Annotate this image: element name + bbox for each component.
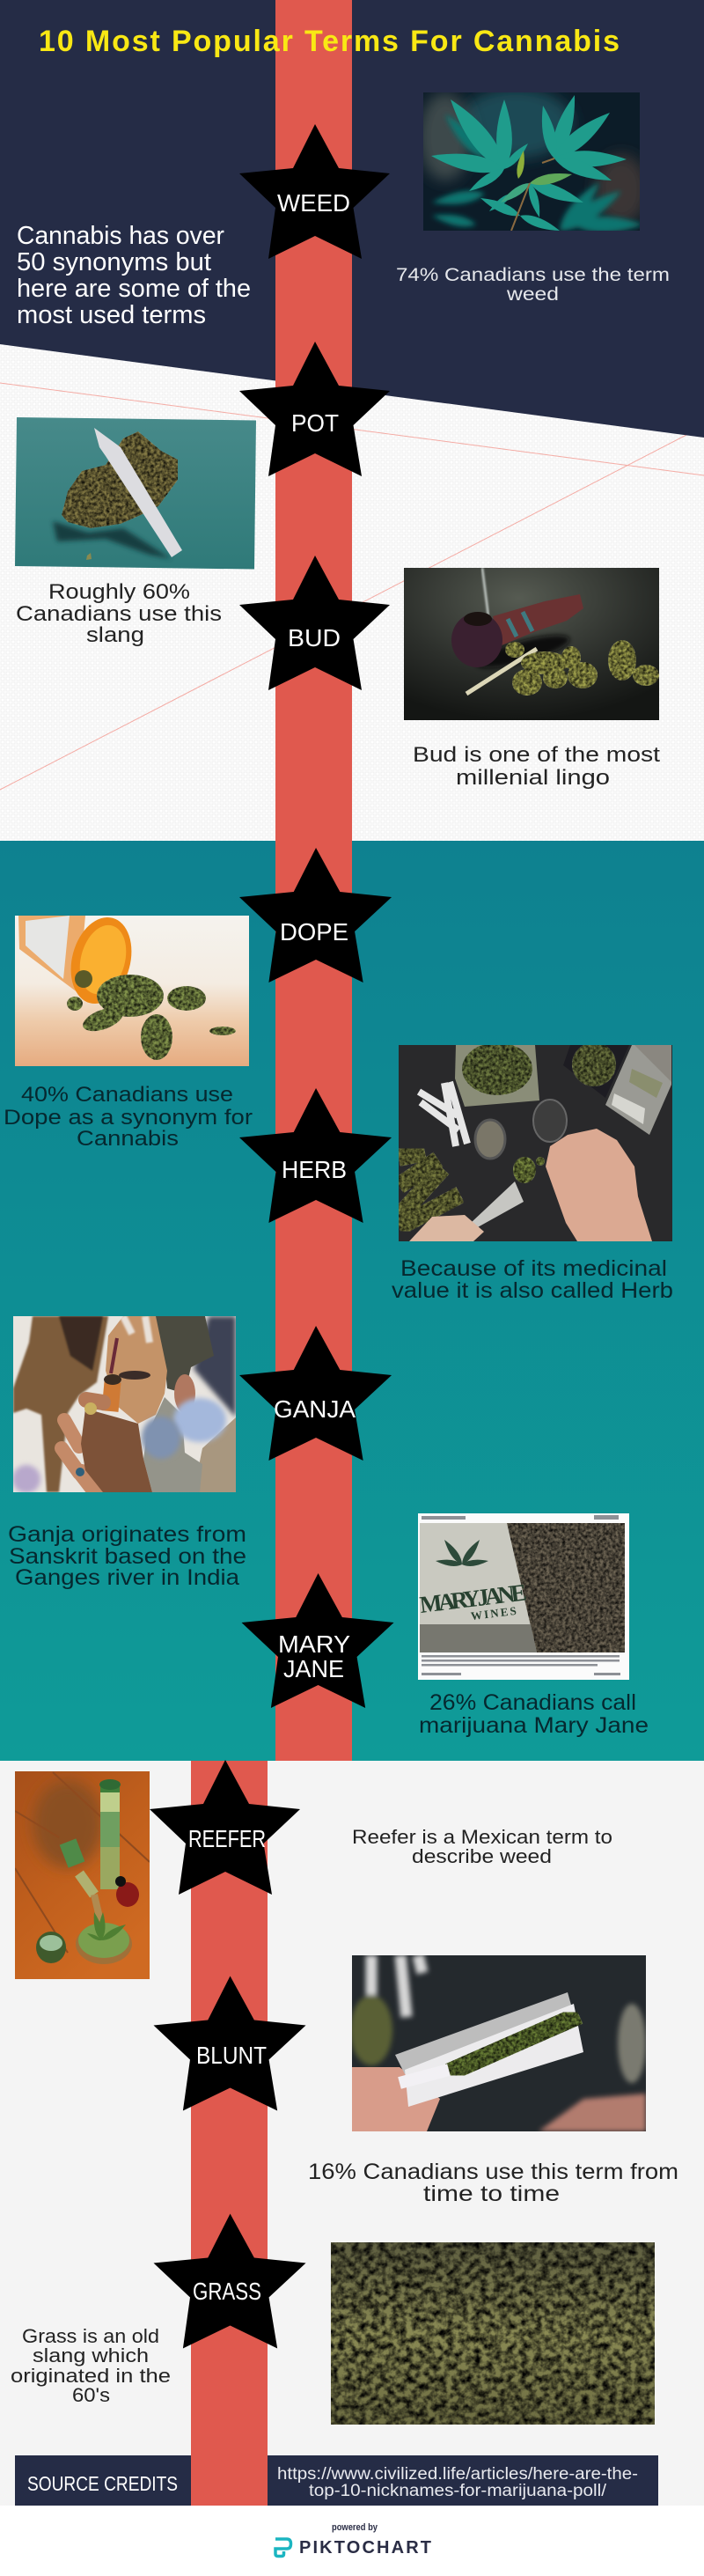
photo: weed leaves bbox=[423, 92, 640, 231]
source credits label bbox=[15, 2455, 191, 2506]
text block: reefer caption: describe weed bbox=[412, 1845, 552, 1867]
text block: herb caption: Because of its medicinal bbox=[400, 1256, 667, 1281]
text block: intro: most used terms bbox=[17, 301, 206, 329]
title: 10 Most Popular Terms For Cannabis bbox=[39, 25, 620, 58]
star: GANJA: GANJA bbox=[274, 1395, 356, 1423]
panel: teal section bbox=[0, 841, 704, 1761]
footer: powered by piktochart: PIKTOCHART bbox=[299, 2538, 431, 2558]
text block: reefer caption bbox=[352, 1826, 612, 1867]
photo: mary jane wine bottle post bbox=[418, 1513, 629, 1680]
text block: pot caption: Canadians use this bbox=[16, 602, 222, 626]
photo: pile of grass buds bbox=[331, 2242, 655, 2425]
text block: herb caption: value it is also called Herb bbox=[392, 1278, 673, 1303]
star: GRASS bbox=[153, 2213, 306, 2349]
text block: pot caption: slang bbox=[86, 623, 144, 647]
photo: rolling a blunt bbox=[352, 1955, 646, 2131]
star: MARY JANE bbox=[241, 1573, 394, 1708]
star: DOPE bbox=[239, 848, 392, 983]
text block: ganja caption: Ganges river in India bbox=[15, 1565, 239, 1590]
photo: mary jane wine bottle post: WINES bbox=[470, 1604, 517, 1623]
photo: pill bottle with buds bbox=[15, 916, 249, 1066]
text block: ganja caption: Ganja originates from bbox=[8, 1522, 246, 1547]
text block: herb caption bbox=[392, 1256, 673, 1303]
text block: reefer caption: Reefer is a Mexican term to bbox=[352, 1826, 612, 1848]
star: GRASS: GRASS bbox=[193, 2278, 261, 2305]
text block: blunt caption bbox=[308, 2160, 678, 2206]
star: BUD bbox=[239, 556, 390, 690]
star: REEFER: REEFER bbox=[188, 1825, 266, 1852]
text block: weed caption bbox=[396, 265, 670, 305]
star: HERB: HERB bbox=[282, 1156, 347, 1183]
star: POT: POT bbox=[291, 409, 339, 437]
photo: man smoking pipe bbox=[13, 1316, 236, 1492]
text block: bud caption: Bud is one of the most bbox=[413, 743, 660, 767]
star: POT bbox=[239, 342, 390, 476]
timeline stripe: lower bbox=[191, 1761, 268, 2506]
text block: grass caption: 60's bbox=[72, 2384, 110, 2406]
star: DOPE: DOPE bbox=[280, 918, 348, 946]
text block: intro bbox=[17, 222, 251, 329]
text block: pot caption: Roughly 60% bbox=[48, 580, 190, 604]
text block: ganja caption: Sanskrit based on the bbox=[9, 1544, 246, 1569]
photo: rolling kit on dark table bbox=[399, 1045, 672, 1241]
source credits url: top-10-nicknames-for-marijuana-poll/ bbox=[309, 2482, 607, 2500]
star: GANJA bbox=[239, 1326, 392, 1461]
photo: joint on bud bbox=[15, 417, 256, 569]
text block: intro: Cannabis has over bbox=[17, 222, 224, 250]
text block: grass caption: slang which bbox=[33, 2344, 149, 2366]
star: WEED bbox=[239, 124, 390, 259]
star: WEED: WEED bbox=[277, 189, 350, 217]
text block: dope caption: Dope as a synonym for bbox=[4, 1106, 253, 1130]
photo: green glass bong bbox=[15, 1771, 150, 1979]
text block: blunt caption: time to time bbox=[423, 2182, 560, 2206]
star: BUD: BUD bbox=[288, 624, 341, 651]
text block: blunt caption: 16% Canadians use this term from bbox=[308, 2160, 678, 2184]
source credits url: https://www.civilized.life/articles/here-are-the- bbox=[277, 2465, 638, 2484]
star: MARY JANE: JANE bbox=[283, 1655, 344, 1682]
panel: navy and dotted intro section bbox=[0, 0, 704, 841]
star: BLUNT bbox=[153, 1976, 306, 2111]
star: HERB bbox=[239, 1088, 392, 1223]
timeline stripe: upper bbox=[275, 0, 352, 1761]
text block: weed caption: weed bbox=[506, 284, 559, 305]
text block: intro: 50 synonyms but bbox=[17, 248, 211, 276]
footer: powered by piktochart: powered by bbox=[332, 2522, 378, 2533]
footer: powered by piktochart bbox=[0, 2506, 704, 2576]
text block: dope caption: Cannabis bbox=[77, 1127, 179, 1151]
text block: grass caption: Grass is an old bbox=[22, 2325, 159, 2347]
text block: mary jane caption: 26% Canadians call bbox=[429, 1690, 636, 1715]
text block: intro: here are some of the bbox=[17, 275, 251, 303]
text block: grass caption: originated in the bbox=[11, 2365, 171, 2387]
text block: bud caption bbox=[413, 743, 660, 790]
text block: mary jane caption bbox=[419, 1690, 649, 1738]
text block: dope caption bbox=[4, 1083, 253, 1151]
star: BLUNT: BLUNT bbox=[196, 2042, 267, 2069]
text block: pot caption bbox=[16, 580, 222, 647]
photo: mary jane wine bottle post: MARY JANE bbox=[418, 1579, 528, 1618]
panel: light grey section bbox=[0, 1761, 704, 2506]
source credits label: SOURCE CREDITS bbox=[27, 2472, 178, 2495]
text block: weed caption: 74% Canadians use the term bbox=[396, 265, 670, 285]
star: REEFER bbox=[150, 1760, 300, 1895]
text block: dope caption: 40% Canadians use bbox=[21, 1083, 233, 1107]
text block: grass caption bbox=[11, 2325, 171, 2406]
photo: pipe and buds bbox=[404, 568, 659, 720]
source credits url bbox=[268, 2455, 658, 2506]
text block: mary jane caption: marijuana Mary Jane bbox=[419, 1713, 649, 1738]
text block: ganja caption bbox=[8, 1522, 246, 1590]
text block: bud caption: millenial lingo bbox=[456, 766, 610, 790]
star: MARY JANE: MARY bbox=[278, 1630, 350, 1658]
